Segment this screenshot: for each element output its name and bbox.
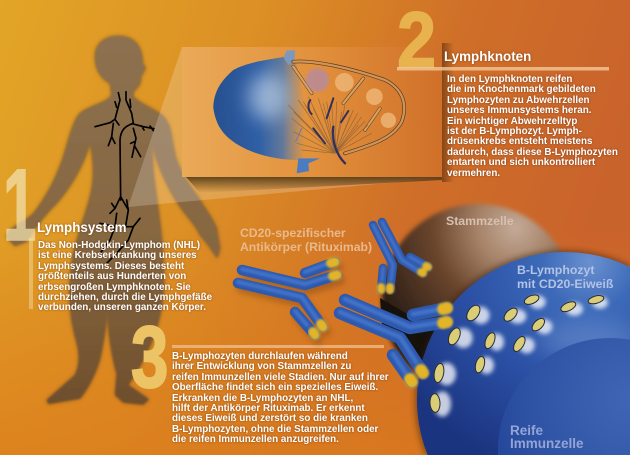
follicles (306, 68, 396, 128)
numeral 1 rule (29, 238, 33, 309)
text block 3: B-Lymphozyten durchlaufen während ihrer Entwicklung von Stammzellen zu reifen Immunzellen viele Stadien. Nur auf ihrer Oberfläche findet sich ein spezielles Eiweiß. Erkranken die B-Lymphozyten an NHL, hilft der Antikörper Rituximab. Er erkennt dieses Eiweiß und zerstört so die kranken B-Lymphozyten, ohne die Stammzellen oder die reifen Immunzellen anzugreifen. (172, 351, 389, 445)
label: antibody: CD20-spezifischer Antikörper (Rituximab) (240, 226, 372, 254)
mature immune cell (498, 338, 630, 455)
label: stem cell: Stammzelle (446, 214, 514, 228)
mature cell halo (540, 322, 630, 358)
text block 2: In den Lymphknoten reifen die im Knochenmark gebildeten Lymphozyten zu Abwehrzellen unseres Immunsystems heran. Ein wichtiger Abwehrzelltyp ist der B-Lymphozyt. Lymph- drüsenkrebs entsteht meistens dadurch, dass diese B-Lymphozyten entarten und sich unkontrolliert vermehren. (447, 74, 618, 179)
node capsule (293, 61, 404, 153)
medulla cords (296, 98, 348, 163)
stem cell (382, 204, 574, 396)
B lymphocyte (415, 250, 630, 455)
antibody front (340, 299, 447, 382)
heading 2: Lymphknoten (444, 49, 531, 64)
section 3 rule (172, 345, 384, 348)
node body (213, 57, 318, 160)
medulla fibres (288, 97, 372, 153)
lymph node illustration (213, 50, 404, 173)
lymph vessels (95, 92, 154, 263)
node stub bottom (297, 158, 320, 173)
label: B lymphocyte: B-Lymphozyt mit CD20-Eiweiß (517, 263, 613, 291)
CD20 proteins (430, 293, 608, 417)
node stub top (284, 50, 295, 65)
human figure (7, 36, 220, 405)
shadow wedge (380, 298, 438, 370)
antibody left (238, 262, 340, 340)
magnifier beam (128, 47, 442, 207)
node highlight (248, 73, 288, 120)
numeral 1: 1 (3, 147, 36, 262)
section 2 rule (397, 67, 609, 70)
numeral 3: 3 (131, 307, 168, 406)
panel shadow bottom (186, 177, 442, 193)
panel: lymph node (182, 47, 442, 177)
antibody top (373, 222, 428, 290)
label: mature immune cell: Reife Immunzelle (510, 423, 584, 451)
panel shadow right (442, 43, 454, 182)
text block 1: Das Non-Hodgkin-Lymphom (NHL) ist eine Krebserkrankung unseres Lymphsystems. Dieses besteht größtenteils aus Hunderten von erbsengroßen Lymphknoten. Sie durchziehen, durch die Lymphgefäße verbunden, unseren ganzen Körper. (38, 240, 212, 313)
heading 1: Lymphsystem (37, 220, 127, 235)
